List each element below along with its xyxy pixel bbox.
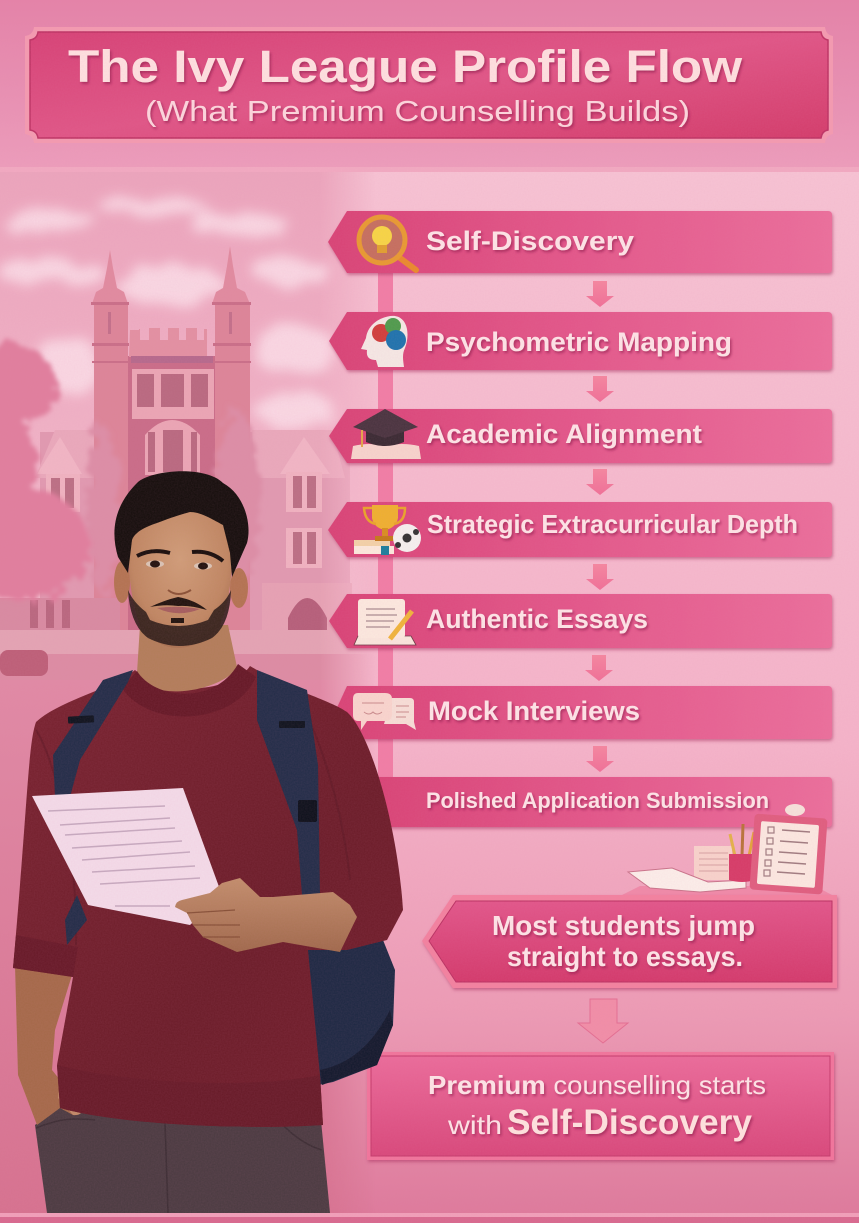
arrow 2 (586, 376, 614, 402)
icon: speech bubbles (353, 693, 416, 730)
sky with clouds (0, 172, 360, 450)
callout text: straight to essays. (507, 941, 743, 972)
label: Mock Interviews (428, 696, 640, 726)
conclusion text: Premium counselling starts (428, 1070, 766, 1100)
large down arrow (578, 999, 628, 1043)
tree (0, 343, 90, 600)
vertical connector line (378, 272, 393, 778)
label: Strategic Extracurricular Depth (427, 509, 798, 539)
arrow 5 (585, 655, 613, 681)
icon: trophy, books and ball (354, 505, 421, 555)
neck (137, 625, 237, 691)
student portrait (13, 471, 403, 1213)
label: Polished Application Submission (426, 788, 769, 813)
arrow 4 (586, 564, 614, 590)
ears (114, 561, 248, 608)
title plaque (25, 27, 833, 143)
icon: head with brain (361, 316, 408, 367)
sweater collar (122, 664, 256, 717)
icon: graduation cap on book (351, 409, 421, 459)
callout: most students jump straight to essays (422, 895, 837, 988)
flow step 7: Polished Application Submission (372, 777, 832, 827)
pants (35, 1105, 330, 1213)
backpack straps (53, 670, 320, 945)
callout text (492, 910, 755, 972)
label: Psychometric Mapping (426, 327, 732, 357)
flow step 5: Authentic Essays (329, 594, 832, 648)
arrow 6 (586, 746, 614, 772)
hand and forearm holding paper (175, 878, 357, 952)
flow step 4: Strategic Extracurricular Depth (328, 502, 832, 557)
label: Academic Alignment (426, 419, 702, 449)
arrow 1 (586, 281, 614, 307)
title text: The Ivy League Profile Flow (68, 41, 743, 92)
paper sheet (32, 788, 222, 925)
flow step 1: Self-Discovery (328, 211, 832, 273)
icon: magnifier with bulb (359, 217, 416, 270)
subtitle text: (What Premium Counselling Builds) (145, 96, 690, 128)
flow step 3: Academic Alignment (329, 409, 832, 463)
flow step 6: Mock Interviews (335, 686, 832, 739)
sweater (13, 666, 403, 1127)
icon: essay and pencil (354, 599, 416, 645)
mustache and soul patch (150, 597, 207, 623)
lower arm and hand in pocket (15, 965, 83, 1125)
face (128, 500, 232, 648)
flow step 2: Psychometric Mapping (329, 312, 832, 370)
eyes, brows and mouth (137, 551, 223, 613)
conclusion text: Self-Discovery (507, 1103, 753, 1142)
backpack body (305, 940, 395, 1085)
arrow 3 (586, 469, 614, 495)
building (0, 246, 400, 680)
background scene: university building (0, 168, 400, 1218)
beard (128, 590, 231, 646)
desk items: book, pencils, clipboard (622, 804, 832, 895)
conclusion text (428, 1070, 766, 1142)
sweater hem, cuff and folds (13, 700, 350, 1127)
label: Authentic Essays (426, 604, 648, 634)
hair (114, 471, 249, 577)
conclusion text: with (447, 1110, 502, 1140)
conclusion box (367, 1052, 834, 1160)
label: Self-Discovery (426, 226, 634, 256)
callout text: Most students jump (492, 910, 755, 941)
bottom strip (0, 1213, 859, 1223)
header band (0, 0, 859, 168)
